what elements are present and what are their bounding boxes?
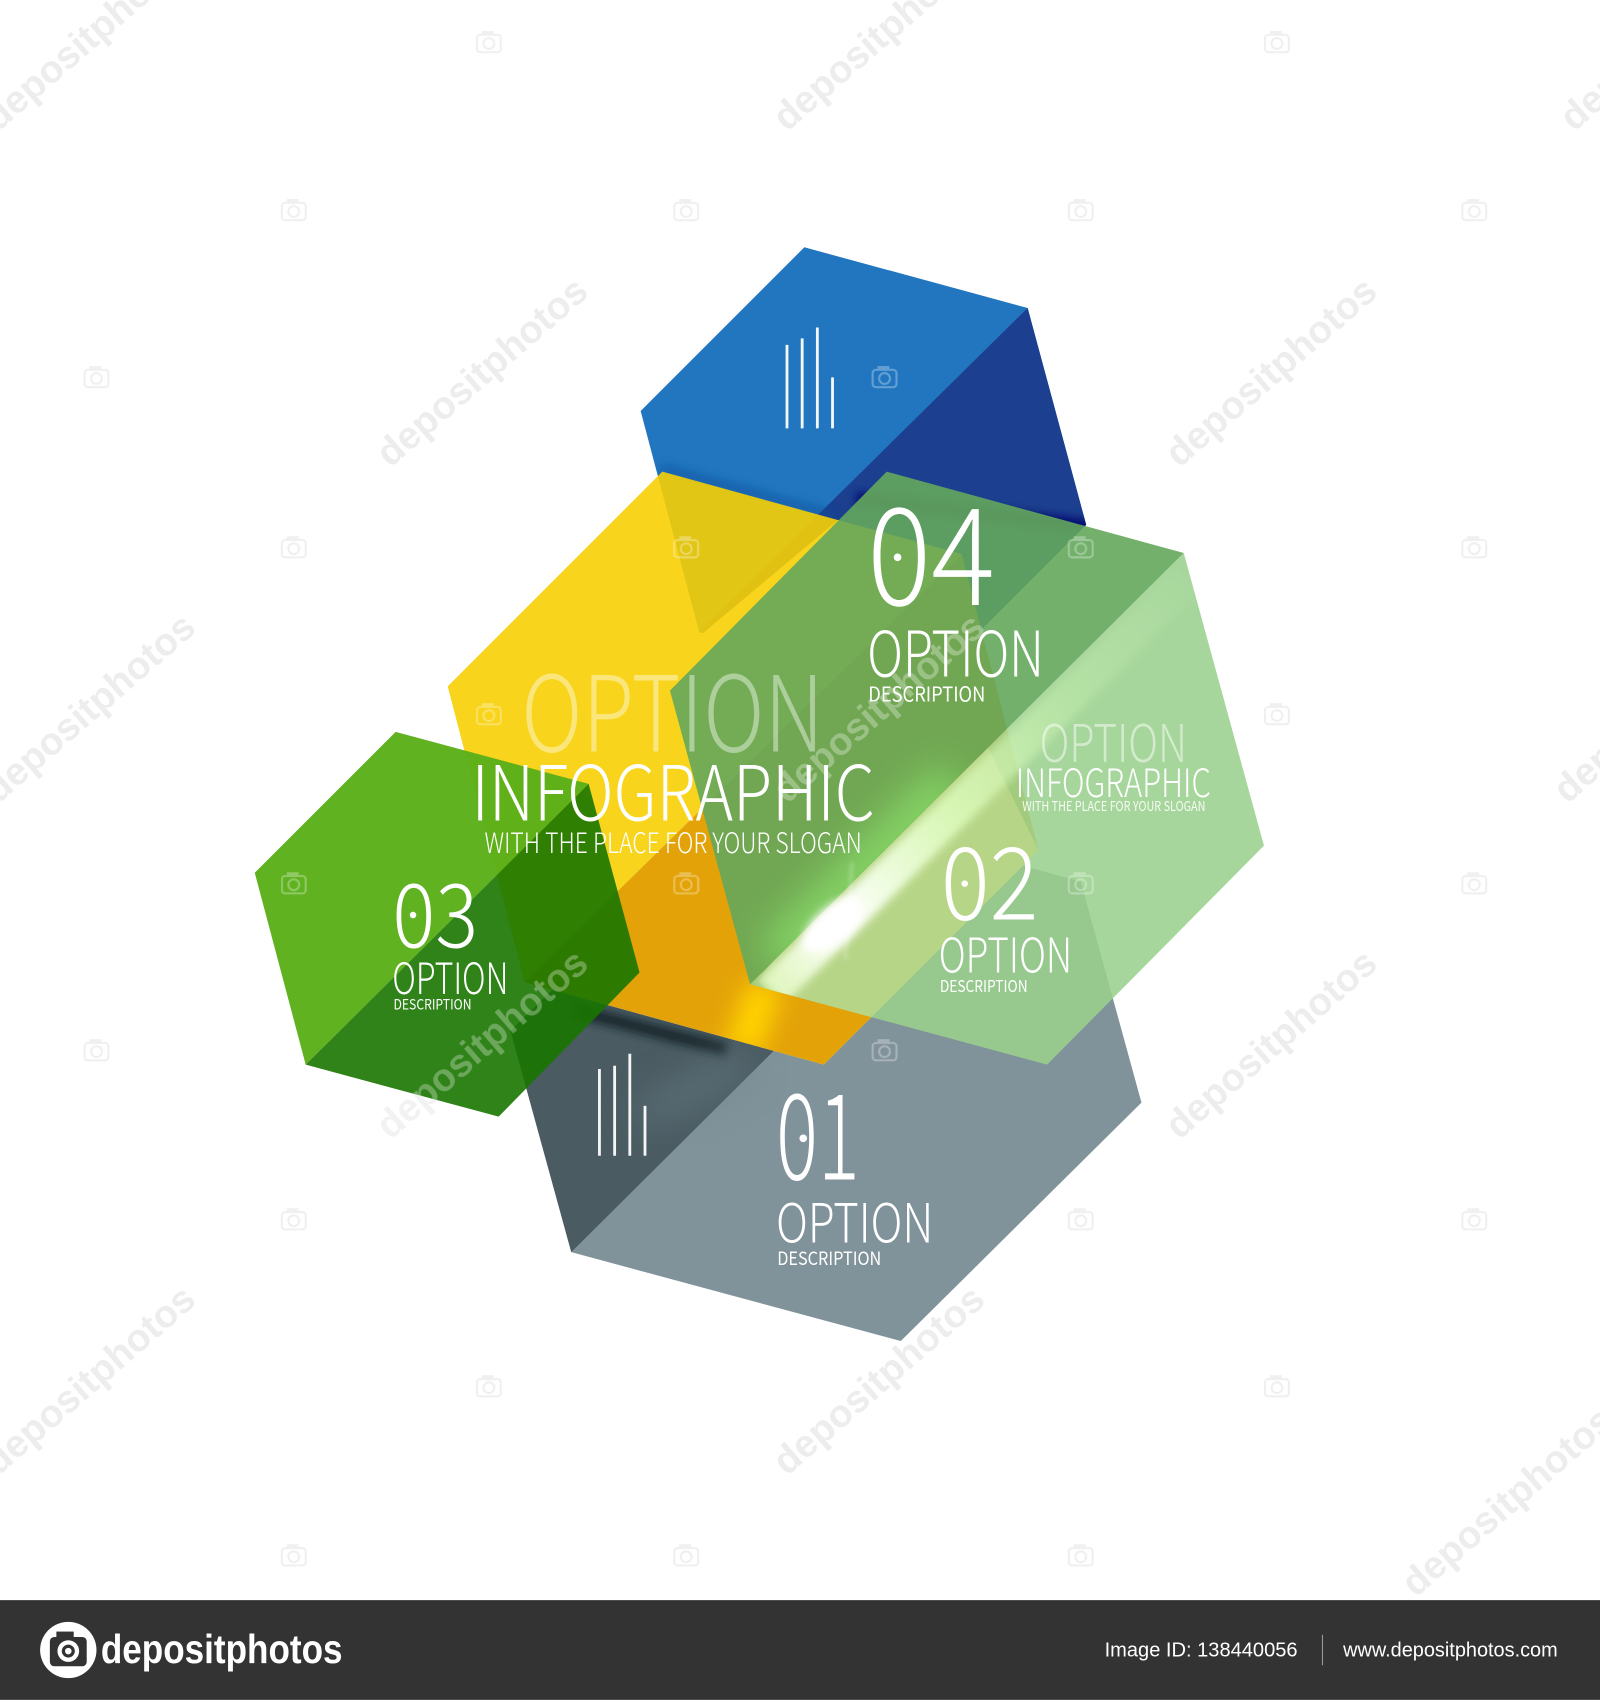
light streak [758,629,1138,1017]
title: option infographic: WITH THE PLACE FOR YOUR SLOGAN [485,821,862,862]
panel: blue hexagon [640,247,1086,633]
panel: yellow hexagon [448,472,1041,1073]
website: www.depositphotos.com [1342,1639,1558,1662]
title: small option infographic: INFOGRAPHIC [1016,753,1211,809]
watermark: translucent overlay on shapes: depositphotos [765,605,993,811]
option 03: DESCRIPTION [393,994,472,1014]
option 01: DESCRIPTION [777,1245,881,1271]
option 04: OPTION [867,605,1044,696]
option 01: OPTION [776,1179,933,1258]
footer bar [0,1600,1600,1700]
title: option infographic: OPTION [521,630,824,782]
watermark: background layer: depositphotos [1157,941,1385,1147]
panel: green hexagon 03 [255,732,640,1117]
option 03: 03 [392,845,478,974]
icon: gray bars [599,1054,645,1156]
watermark: background layer: depositphotos [368,269,596,475]
watermark: translucent overlay on shapes [282,367,1093,1147]
icon: blue bars [787,328,833,428]
title: small option infographic [1016,702,1211,815]
option 04: DESCRIPTION [868,677,985,707]
option 04 [867,449,1044,707]
title: small option infographic: OPTION [1040,702,1187,777]
option 01: 01 [776,1043,860,1215]
option 02: OPTION [939,917,1072,986]
option 03 [392,845,508,1014]
option 02 [939,803,1072,997]
option 01 [776,1043,933,1271]
watermark: translucent overlay on shapes: depositphotos [368,941,596,1147]
watermark: background layer: depositphotos [368,941,596,1147]
option 02: 02 [941,803,1038,949]
option 02: DESCRIPTION [940,973,1028,997]
title: small option infographic: WITH THE PLACE FOR YOUR SLOGAN [1022,795,1205,815]
icon: depositphotos logo [40,1622,96,1678]
panel: gray hexagon [510,866,1142,1341]
option 03: OPTION [392,945,508,1007]
panel: glass hexagon 04 and 02 [670,472,1264,1065]
logo text: depositphotos [101,1626,343,1672]
title: option infographic [472,630,875,862]
option 04: 04 [867,449,995,645]
title: option infographic: INFOGRAPHIC [472,733,875,843]
watermark: background layer: depositphotos [1157,269,1385,475]
image id: Image ID: 138440056 [1105,1639,1298,1662]
watermark: background layer: depositphotos [765,1277,993,1483]
